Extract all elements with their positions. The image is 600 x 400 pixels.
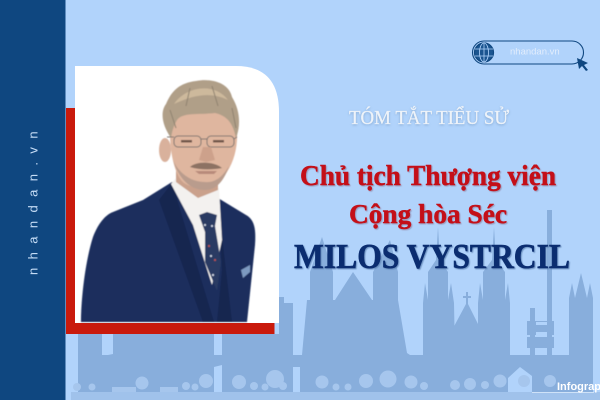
face <box>170 107 237 187</box>
icon: cursor <box>577 58 588 71</box>
subtitle: TÓM TẮT TIỂU SỬ <box>349 108 510 130</box>
nose <box>199 147 215 162</box>
red frame <box>66 108 274 334</box>
shirt <box>171 178 222 285</box>
tie <box>199 212 221 291</box>
skyline silhouette <box>71 210 600 400</box>
hair <box>163 80 239 138</box>
title line 2: Cộng hòa Séc <box>349 199 507 229</box>
left navy band <box>0 0 66 400</box>
icon: globe <box>474 43 494 62</box>
skyline trees <box>73 370 556 392</box>
website badge <box>472 41 588 71</box>
badge label: nhandan.vn <box>510 46 560 58</box>
portrait photo <box>81 80 255 322</box>
vertical site name: nhandan.vn <box>26 123 40 275</box>
neck <box>176 170 218 198</box>
moustache and mouth <box>190 163 222 169</box>
jacket <box>81 182 255 322</box>
name: MILOS VYSTRCIL <box>295 238 571 277</box>
title line 1: Chủ tịch Thượng viện <box>301 162 557 193</box>
pocket square <box>241 265 250 278</box>
white photo panel <box>75 66 279 323</box>
name: MILOS VYSTRCIL <box>294 237 570 276</box>
subtitle: TÓM TẮT TIỂU SỬ <box>349 107 510 129</box>
ear <box>159 138 171 162</box>
title line 2: Cộng hòa Séc <box>350 200 508 230</box>
title line 1: Chủ tịch Thượng viện <box>300 161 556 192</box>
glasses <box>167 136 237 147</box>
